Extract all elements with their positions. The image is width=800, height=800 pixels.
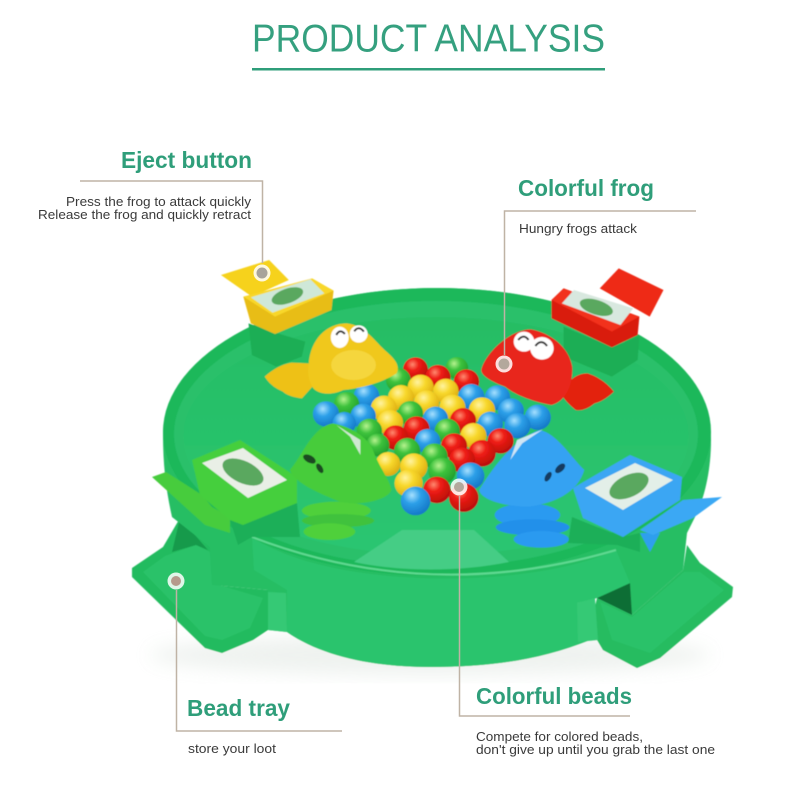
callout: bead tray: Bead tray	[187, 695, 290, 721]
yellow frog	[265, 323, 398, 398]
rim front highlight	[252, 537, 616, 575]
callout: colorful beads	[450, 478, 715, 757]
callout: eject button: Eject button	[121, 147, 252, 173]
callout: colorful frog	[496, 175, 696, 372]
blue launcher	[568, 455, 722, 552]
product: frog game board	[132, 260, 733, 675]
callout: bead tray	[168, 572, 342, 756]
red launcher	[552, 268, 663, 377]
left bead tray	[132, 518, 268, 653]
left post	[268, 592, 287, 632]
callout: eject button: Release the frog and quickly retract	[38, 208, 252, 222]
yellow launcher	[221, 260, 334, 367]
bowl front wall	[252, 537, 630, 667]
hole beside right tray	[597, 583, 632, 615]
bowl inner ring	[174, 301, 698, 567]
game pieces in detail coordinates	[221, 260, 663, 548]
right bead tray	[590, 545, 733, 668]
callout: colorful frog: Colorful frog	[518, 175, 654, 201]
green launcher	[152, 440, 300, 545]
floor highlight	[354, 530, 509, 570]
bowl rim	[163, 288, 711, 576]
bowl outer wall	[163, 288, 711, 667]
drop shadow	[150, 635, 710, 675]
callout: colorful frog: Hungry frogs attack	[519, 222, 638, 236]
callout: colorful beads: don't give up until you grab the last one	[476, 743, 715, 757]
callout: colorful beads: Colorful beads	[476, 683, 632, 709]
callout: eject button	[38, 147, 270, 282]
callout: bead tray: store your loot	[188, 742, 277, 756]
beads	[313, 357, 551, 515]
blue frog	[479, 429, 584, 548]
green frog	[290, 423, 391, 540]
bowl inner floor	[183, 317, 689, 555]
right post	[577, 598, 598, 642]
title: PRODUCT ANALYSIS	[252, 18, 605, 60]
callout: eject button: Press the frog to attack quickly	[66, 195, 252, 209]
red frog	[481, 329, 614, 410]
callout: colorful beads: Compete for colored beads,	[476, 730, 643, 744]
